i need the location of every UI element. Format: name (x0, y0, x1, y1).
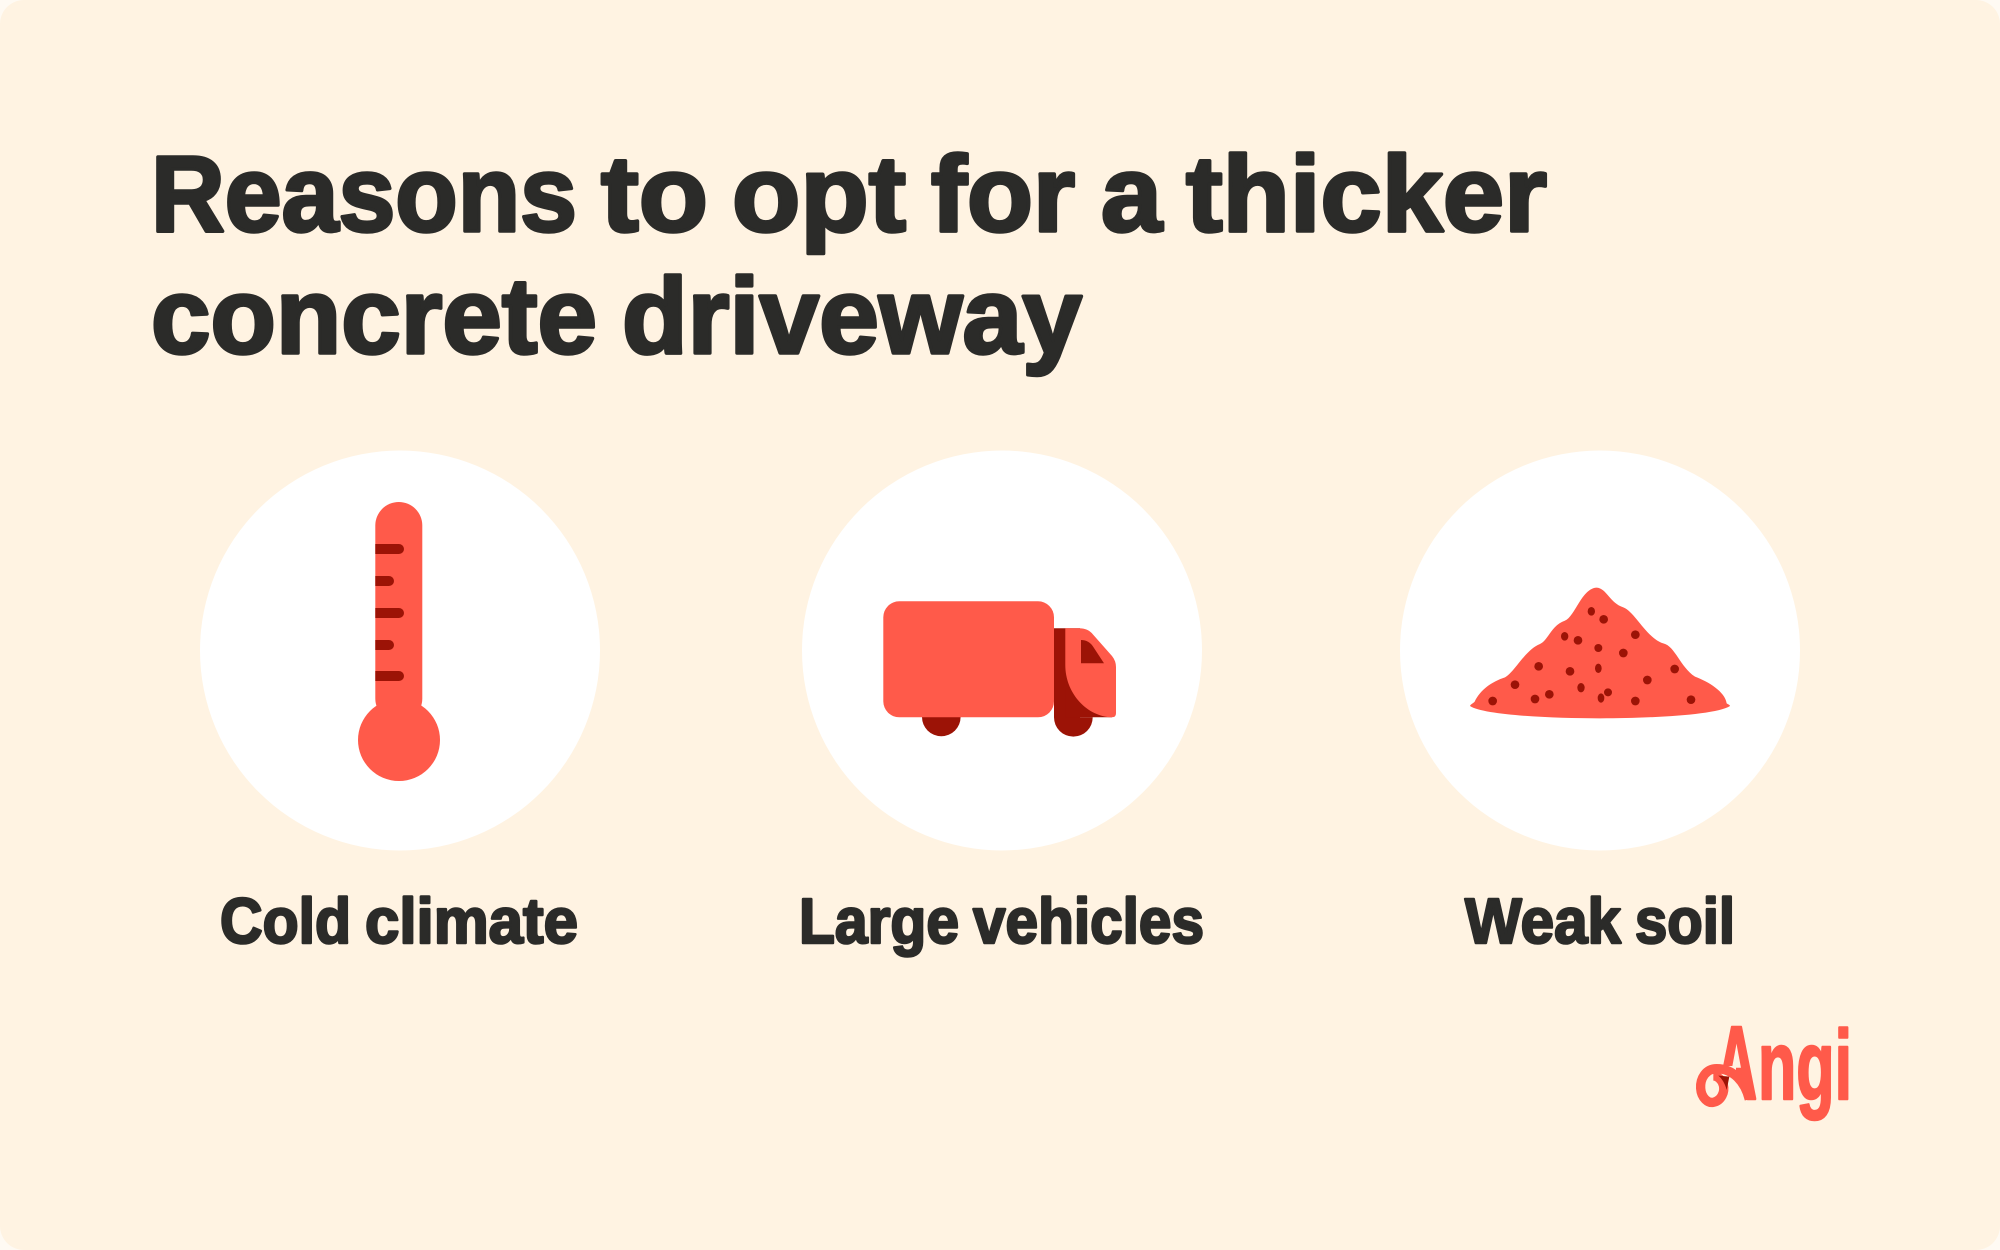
title: concrete (151, 255, 597, 376)
label: cold climate: Cold (220, 885, 351, 957)
title (151, 133, 1547, 376)
label: weak soil (1465, 885, 1735, 957)
icon circle: weak soil (1400, 450, 1800, 850)
logo: Angi: ngi (1758, 1010, 1852, 1120)
icon: soil pile (1470, 588, 1730, 718)
panel: weak soil (1400, 450, 1800, 957)
label: large vehicles (799, 885, 1204, 957)
title: opt (732, 133, 906, 254)
label: large vehicles: Large (799, 885, 959, 957)
label: cold climate: climate (365, 885, 578, 957)
label: large vehicles: vehicles (973, 885, 1204, 957)
panel: large vehicles (799, 450, 1204, 957)
icon circle: cold climate (200, 450, 600, 850)
title: thicker (1186, 133, 1547, 254)
icon: thermometer (358, 502, 440, 781)
title: driveway (622, 255, 1082, 376)
title: Reasons (151, 133, 577, 254)
logo: Angi: A (1716, 1006, 1757, 1122)
icon circle: large vehicles (802, 450, 1202, 850)
title: to (601, 133, 708, 254)
panel: cold climate (200, 450, 600, 957)
title: a (1101, 133, 1163, 254)
title: for (931, 133, 1075, 254)
label: weak soil: soil (1635, 885, 1735, 957)
label: weak soil: Weak (1465, 885, 1621, 957)
icon: truck (883, 601, 1116, 737)
logo: Angi (1696, 1026, 1848, 1122)
label: cold climate (220, 885, 578, 957)
